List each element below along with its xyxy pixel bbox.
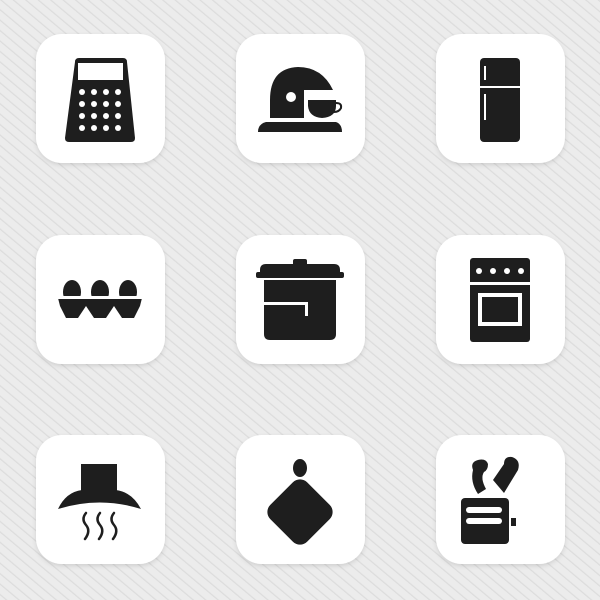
tiles — [36, 34, 565, 564]
icon: stove — [470, 258, 530, 342]
icon: grater — [65, 58, 135, 142]
icon: coffee machine — [258, 67, 342, 132]
icon: fridge — [480, 58, 520, 142]
icon: eggs — [58, 280, 142, 318]
icon: potholder — [263, 459, 337, 549]
icon: range hood — [58, 464, 141, 539]
icon: pot — [256, 259, 344, 340]
icon: toaster — [461, 457, 519, 544]
